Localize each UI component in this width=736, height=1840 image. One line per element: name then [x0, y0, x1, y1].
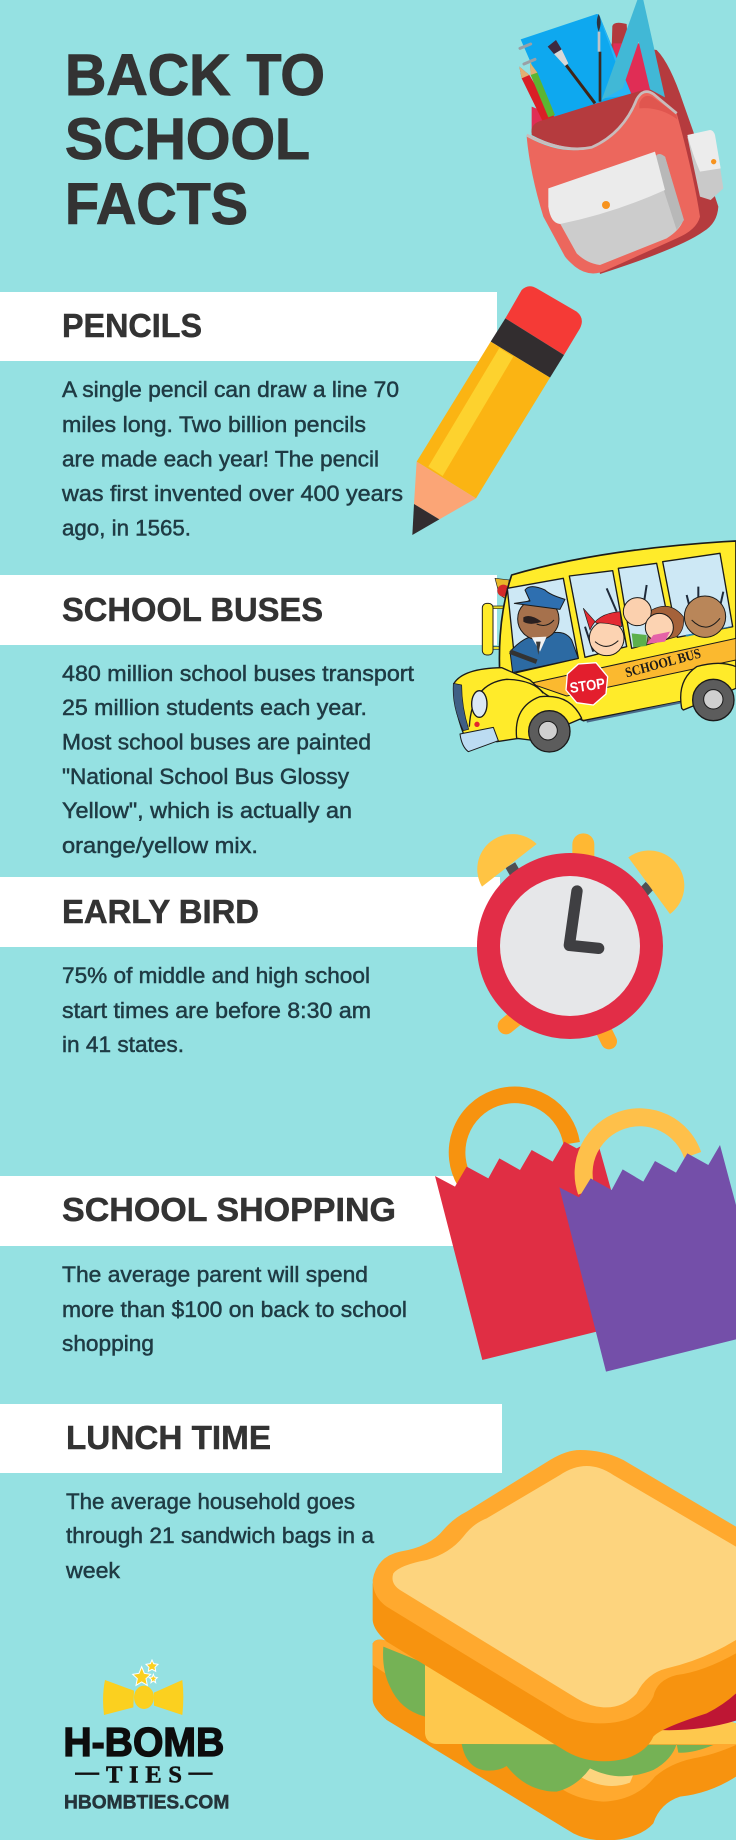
text block: school buses — [62, 661, 414, 858]
text block: early bird — [62, 963, 371, 1057]
text block: pencils: ago, in 1565. — [62, 516, 191, 540]
text block: pencils: A single pencil can draw a line 70 — [62, 377, 399, 402]
panel: school shopping — [0, 1176, 460, 1356]
heading: school buses: SCHOOL BUSES — [62, 591, 323, 628]
heading: pencils: PENCILS — [62, 307, 202, 344]
panel: lunch time — [0, 1404, 502, 1583]
text block: school buses: 480 million school buses transport — [62, 661, 414, 686]
icon: school bus — [453, 541, 736, 752]
icon: alarm clock — [477, 834, 684, 1041]
icon: shopping bags — [435, 1095, 736, 1372]
icon: bow tie — [103, 1660, 183, 1715]
title — [65, 43, 325, 237]
text block: school buses: 25 million students each year. — [62, 695, 367, 720]
text block: school shopping — [62, 1262, 407, 1356]
children — [583, 585, 733, 656]
text block: lunch time: week — [65, 1558, 121, 1583]
logo: H-Bomb Ties: TIES — [106, 1762, 182, 1789]
text block: pencils: miles long. Two billion pencils — [62, 412, 366, 437]
text block: pencils: are made each year! The pencil — [62, 446, 379, 472]
front wheel — [516, 696, 582, 752]
icon: school bus: SCHOOL BUS — [624, 647, 703, 681]
text block: early bird: 75% of middle and high school — [62, 963, 370, 988]
logo: H-Bomb Ties: H-BOMB — [63, 1719, 224, 1765]
rear wheel — [681, 663, 736, 721]
icon: pencil — [412, 286, 582, 535]
icon: sandwich — [373, 1450, 736, 1840]
text block: early bird: start times are before 8:30 am — [62, 998, 371, 1023]
text block: school shopping: The average parent will spend — [62, 1262, 368, 1287]
windows — [507, 553, 733, 673]
text block: school shopping: shopping — [62, 1331, 154, 1356]
text block: school buses: Yellow", which is actually an — [62, 798, 352, 823]
logo: H-Bomb Ties: HBOMBTIES.COM — [64, 1792, 229, 1813]
heading: school shopping: SCHOOL SHOPPING — [62, 1191, 396, 1228]
heading: lunch time: LUNCH TIME — [66, 1419, 271, 1456]
driver — [510, 587, 578, 673]
title: BACK TO — [65, 43, 325, 108]
logo: H-Bomb Ties — [63, 1660, 229, 1813]
text block: school shopping: more than $100 on back to school — [62, 1297, 407, 1322]
title: SCHOOL — [65, 107, 310, 172]
text block: school buses: "National School Bus Glossy — [62, 764, 349, 789]
text block: early bird: in 41 states. — [62, 1032, 184, 1057]
hood — [454, 668, 580, 742]
stripe — [530, 638, 736, 696]
text block: lunch time: through 21 sandwich bags in a — [66, 1523, 375, 1548]
title: FACTS — [65, 172, 248, 237]
heading: early bird: EARLY BIRD — [62, 893, 259, 930]
stop sign — [566, 663, 608, 705]
panel: early bird — [0, 877, 500, 1057]
text block: lunch time: The average household goes — [66, 1489, 355, 1514]
text block: pencils: was first invented over 400 years — [61, 481, 403, 506]
text block: school buses: Most school buses are painted — [62, 730, 371, 754]
text block: pencils — [61, 377, 403, 540]
text block: school buses: orange/yellow mix. — [62, 833, 258, 858]
text block: lunch time — [65, 1489, 375, 1583]
stop sign: STOP — [569, 676, 606, 697]
icon: backpack — [519, 0, 723, 274]
panel: school buses — [0, 575, 497, 858]
panel: pencils — [0, 292, 497, 540]
